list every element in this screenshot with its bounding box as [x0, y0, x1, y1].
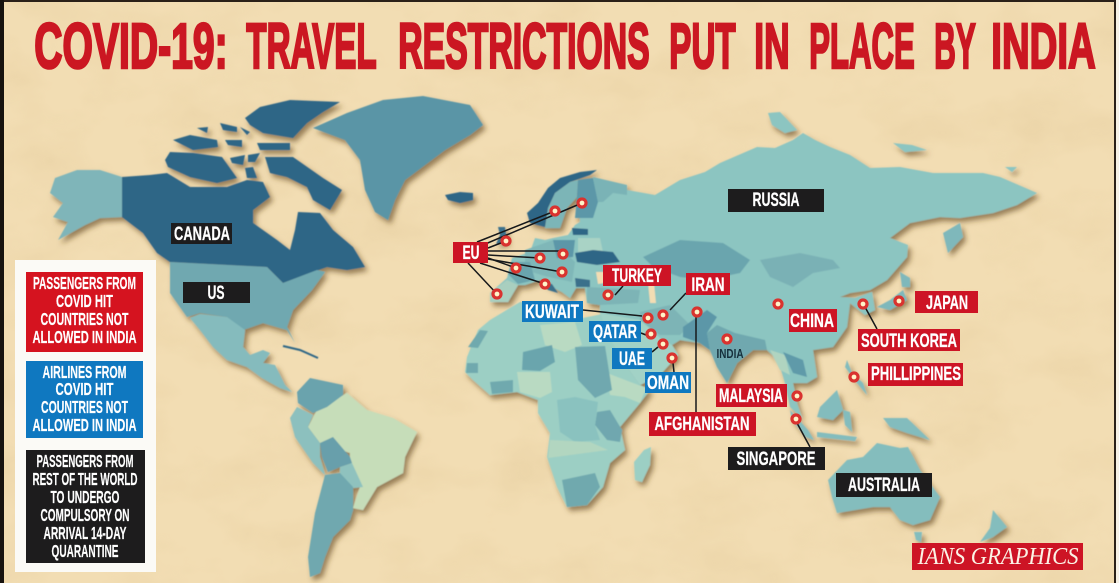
- label: Australia: [836, 473, 932, 497]
- legend: airlines not allowed: AIRLINES FROM: [42, 362, 126, 382]
- Alaska: [50, 170, 122, 240]
- label: Canada: CANADA: [174, 223, 230, 245]
- label: Russia: RUSSIA: [752, 189, 800, 211]
- legend: passengers not allowed: ALLOWED IN INDIA: [32, 327, 137, 347]
- legend: quarantine: QUARANTINE: [52, 541, 118, 561]
- legend panel: [15, 260, 156, 572]
- Sakhalin: [943, 223, 963, 253]
- legend: airlines not allowed: COVID HIT: [56, 379, 114, 399]
- label: Phillippines: PHILLIPPINES: [871, 363, 961, 385]
- legend: quarantine: TO UNDERGO: [50, 487, 120, 507]
- label: Kuwait: KUWAIT: [525, 301, 579, 323]
- Eurasia: [490, 133, 1037, 418]
- legend: quarantine: PASSENGERS FROM: [36, 451, 134, 471]
- title: PUT: [669, 10, 736, 82]
- label: Phillippines: [868, 363, 963, 386]
- label: Australia: AUSTRALIA: [848, 474, 920, 496]
- legend: quarantine: REST OF THE WORLD: [32, 469, 138, 489]
- legend: airlines not allowed: COUNTRIES NOT: [41, 397, 128, 417]
- Kola region: [593, 177, 627, 202]
- credit: IANS Graphics: IANS GRAPHICS: [917, 544, 1078, 570]
- Australia and New Zealand: [828, 443, 1007, 542]
- title: IN: [754, 10, 790, 82]
- legend: quarantine: [26, 450, 145, 563]
- Sweden: [545, 180, 578, 228]
- legend: quarantine: COMPULSORY ON: [40, 505, 130, 525]
- label: Russia: [728, 189, 824, 212]
- label: Japan: [915, 291, 978, 314]
- label: Afghanistan: AFGHANISTAN: [654, 413, 750, 435]
- label: Turkey: [603, 265, 671, 287]
- legend: passengers not allowed: PASSENGERS FROM: [33, 273, 136, 293]
- label: US: US: [208, 282, 224, 304]
- label: Canada: [171, 223, 232, 245]
- Africa: [465, 302, 650, 507]
- label: Iran: [686, 273, 730, 296]
- label: India: INDIA: [716, 347, 744, 361]
- Iceland: [445, 192, 473, 203]
- label: EU: [453, 242, 488, 264]
- Japan: [877, 272, 910, 310]
- label: Turkey: TURKEY: [612, 265, 662, 287]
- location markers: [493, 199, 903, 423]
- connector lines: [468, 203, 877, 447]
- label: Iran: IRAN: [692, 274, 724, 296]
- Madagascar: [634, 447, 651, 482]
- legend: airlines not allowed: [26, 361, 143, 438]
- country shading on Eurasia: [490, 228, 840, 385]
- label: Singapore: [728, 447, 825, 470]
- label: South Korea: [858, 329, 960, 352]
- Finland: [575, 178, 598, 218]
- world map: [50, 96, 1037, 577]
- title: COVID-19:: [34, 10, 228, 82]
- Arctic islands: [768, 112, 1017, 172]
- legend: passengers not allowed: [26, 272, 143, 352]
- legend: passengers not allowed: COUNTRIES NOT: [40, 309, 129, 329]
- legend: airlines not allowed: ALLOWED IN INDIA: [32, 415, 137, 435]
- label: Oman: OMAN: [647, 372, 689, 394]
- Cuba: [283, 346, 318, 358]
- Greenland: [313, 96, 483, 220]
- South America: [290, 378, 417, 577]
- label: Japan: JAPAN: [926, 292, 968, 314]
- label: Malaysia: [716, 384, 787, 407]
- United States: [170, 262, 325, 343]
- title: [34, 10, 1096, 82]
- Mexico and Central America: [190, 314, 292, 392]
- title: RESTRICTIONS: [398, 10, 650, 82]
- label: Malaysia: MALAYSIA: [719, 385, 783, 407]
- label: UAE: [612, 348, 652, 370]
- title: TRAVEL: [246, 10, 377, 82]
- United Kingdom: [496, 227, 507, 244]
- label: China: CHINA: [790, 310, 834, 332]
- legend: quarantine: ARRIVAL 14-DAY: [44, 523, 127, 543]
- label: Qatar: [589, 321, 641, 343]
- label: Afghanistan: [649, 412, 756, 436]
- label: UAE: UAE: [619, 348, 645, 370]
- legend: passengers not allowed: COVID HIT: [56, 291, 113, 311]
- title: BY: [934, 10, 976, 82]
- label: Qatar: QATAR: [593, 321, 637, 343]
- label: Singapore: SINGAPORE: [736, 448, 816, 470]
- label: US: [183, 282, 250, 304]
- Southeast Asia islands: [790, 360, 930, 441]
- title: PLACE: [809, 10, 915, 82]
- label: South Korea: SOUTH KOREA: [861, 330, 957, 352]
- land masses with shadow: [50, 96, 1037, 577]
- label: EU: EU: [462, 242, 480, 264]
- Norway: [527, 170, 597, 227]
- Canada: [122, 100, 365, 283]
